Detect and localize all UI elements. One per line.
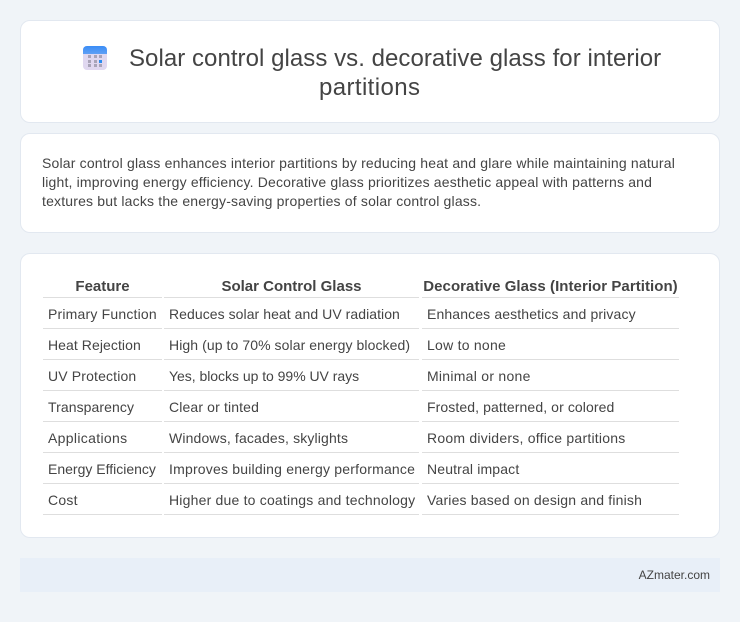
footer bar: [20, 558, 720, 592]
table header: Feature: [75, 278, 130, 295]
row: transparency: [43, 399, 679, 422]
table header: [43, 278, 679, 298]
row: transparency: Frosted, patterned, or colored: [427, 399, 614, 415]
row: applications: Windows, facades, skylights: [169, 430, 348, 446]
row: cost: Higher due to coatings and technology: [169, 492, 415, 508]
row: uv protection: [43, 368, 679, 391]
summary text: [42, 155, 675, 209]
row: heat rejection: Low to none: [427, 337, 506, 353]
row: uv protection: UV Protection: [48, 368, 136, 384]
row: energy efficiency: Neutral impact: [427, 461, 519, 477]
row: cost: Cost: [48, 492, 78, 508]
row: primary function: Reduces solar heat and UV radiation: [169, 306, 400, 322]
row: uv protection: Minimal or none: [427, 368, 531, 384]
summary text: Solar control glass enhances interior partitions by reducing heat and glare while maintaining natural: [42, 155, 675, 171]
summary text: light, improving energy efficiency. Decorative glass prioritizes aesthetic appeal with patterns and: [42, 174, 652, 190]
heading: partitions: [319, 74, 420, 101]
row: primary function: Primary Function: [48, 306, 157, 322]
row: energy efficiency: Energy Efficiency: [48, 461, 156, 477]
row: primary function: [43, 306, 679, 329]
row: applications: Room dividers, office partitions: [427, 430, 626, 446]
row: applications: [43, 430, 679, 453]
footer text: AZmater.com: [639, 568, 710, 582]
row: heat rejection: [43, 337, 679, 360]
row: heat rejection: Heat Rejection: [48, 337, 141, 353]
panel: title: [20, 20, 720, 123]
table header: Solar Control Glass: [221, 278, 362, 295]
row: energy efficiency: [43, 461, 679, 484]
panel: summary: [20, 133, 720, 233]
table header: Decorative Glass (Interior Partition): [423, 278, 678, 295]
row: cost: [43, 492, 679, 515]
row: transparency: Clear or tinted: [169, 399, 259, 415]
row: energy efficiency: Improves building energy performance: [169, 461, 415, 477]
row: uv protection: Yes, blocks up to 99% UV rays: [169, 368, 359, 384]
heading: [129, 45, 661, 101]
row: heat rejection: High (up to 70% solar energy blocked): [169, 337, 410, 353]
row: applications: Applications: [48, 430, 127, 446]
row: cost: Varies based on design and finish: [427, 492, 642, 508]
row: transparency: Transparency: [48, 399, 134, 415]
heading: Solar control glass vs. decorative glass for interior: [129, 45, 661, 72]
panel: comparison table: [20, 253, 720, 538]
row: primary function: Enhances aesthetics and privacy: [427, 306, 636, 322]
summary text: textures but lacks the energy-saving properties of solar control glass.: [42, 193, 481, 209]
icon: calendar: [83, 46, 107, 70]
